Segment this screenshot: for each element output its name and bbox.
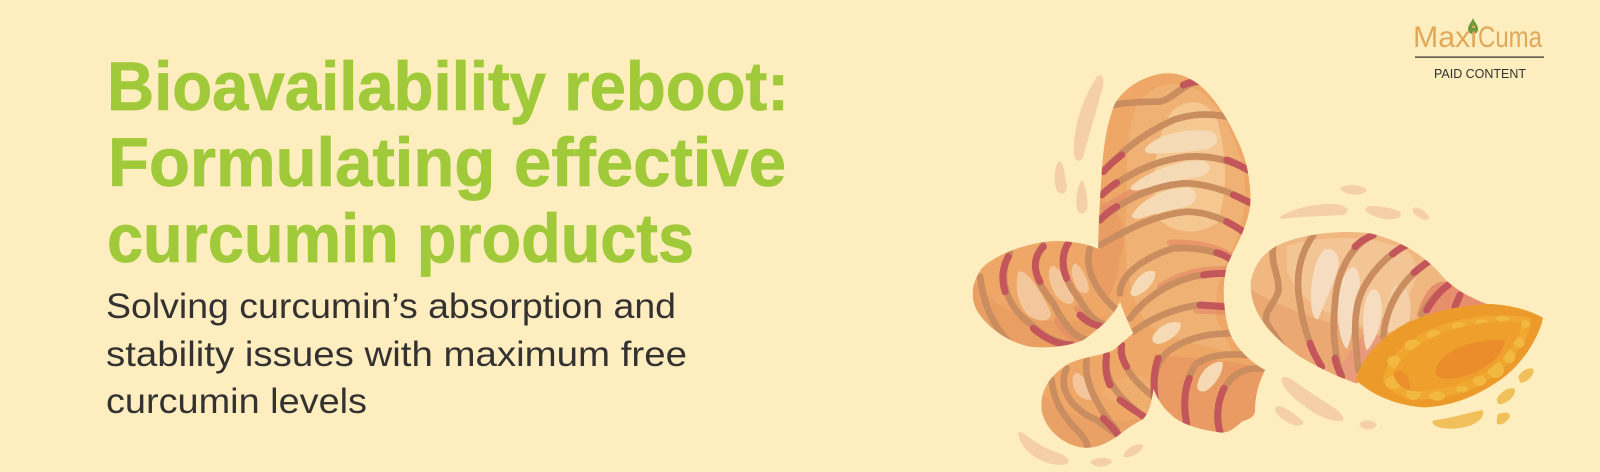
icon: green drop: [1468, 18, 1478, 34]
logo: MaxiCuma: [1413, 18, 1544, 81]
lighter central shading: [1126, 84, 1245, 353]
cut face: middle band: [1383, 315, 1532, 399]
highlights: [1145, 130, 1217, 153]
splashes around root: [1018, 75, 1143, 467]
subtitle: Solving curcumin’s absorption and: [106, 287, 676, 326]
cut piece body: [1250, 232, 1488, 384]
title: Formulating effective: [108, 124, 786, 201]
yellow splashes: [1433, 368, 1534, 429]
cut face: centre shade: [1394, 371, 1410, 391]
subtitle: [106, 287, 687, 421]
title: curcumin products: [107, 200, 694, 277]
subtitle: stability issues with maximum free: [106, 335, 687, 374]
illustration: main turmeric root: [972, 73, 1265, 466]
logo wordmark second part: Cuma: [1478, 21, 1542, 54]
cut face: outer flesh: [1356, 304, 1543, 407]
logo wordmark: Maxi: [1413, 21, 1477, 54]
cut face: centre: [1436, 340, 1505, 379]
illustration: cut turmeric piece: [1243, 185, 1543, 429]
title: Bioavailability reboot:: [107, 48, 789, 125]
paid content label: PAID CONTENT: [1434, 67, 1526, 81]
root body: [972, 73, 1265, 448]
highlights: [1311, 249, 1339, 319]
lighter upper shading: [1154, 102, 1225, 232]
main stripes: [980, 82, 1265, 448]
cut face: yellow dots: [1385, 316, 1530, 401]
logo rule: [1415, 56, 1544, 58]
title: [107, 48, 789, 277]
splashes around cut piece: [1275, 185, 1429, 429]
darker lobe shading: [1090, 200, 1124, 300]
red stripe accents: [1003, 82, 1252, 435]
subtitle: curcumin levels: [106, 382, 367, 421]
stripes: [1266, 235, 1448, 377]
red stripe accents: [1310, 235, 1460, 377]
pink stripe shadows: [1100, 188, 1147, 212]
cut face: inner core: [1394, 321, 1522, 391]
